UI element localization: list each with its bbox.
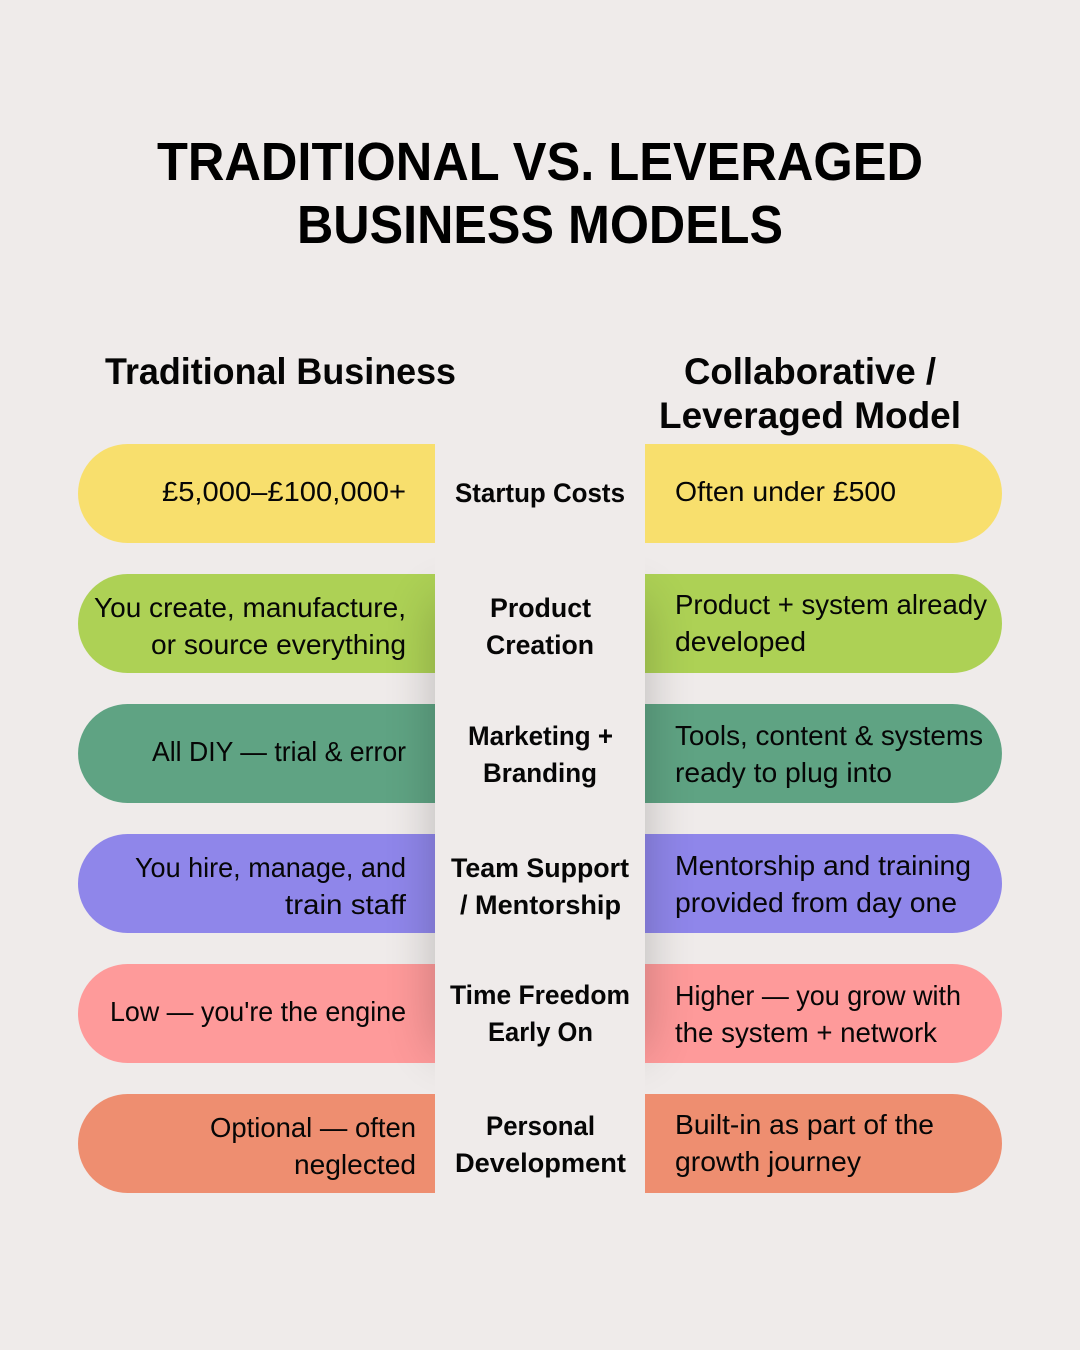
text: traditional column values: £5,000–£100,000+ — [162, 476, 406, 507]
text: category labels: Startup Costs — [455, 478, 625, 508]
title: TRADITIONAL VS. LEVERAGED — [157, 132, 923, 192]
text: leveraged column values: Built-in as part of the — [675, 1109, 934, 1140]
text: leveraged column values: Tools, content & systems — [675, 720, 983, 751]
pill: time freedom leveraged — [645, 964, 1002, 1063]
pill: startup costs traditional — [78, 444, 435, 543]
panel: right column pills — [645, 444, 1002, 1193]
text: category labels: Early On — [488, 1017, 593, 1047]
text: category labels: Product — [490, 593, 591, 623]
pill: product creation leveraged — [645, 574, 1002, 673]
text: traditional column values — [94, 476, 416, 1180]
title — [157, 132, 923, 255]
pill: product creation traditional — [78, 574, 435, 673]
text: category labels: Branding — [483, 758, 597, 788]
pill: personal development leveraged — [645, 1094, 1002, 1193]
text: leveraged column values: provided from day one — [675, 887, 957, 918]
panel: centre category column — [435, 444, 645, 1193]
text: leveraged column values: Often under £500 — [675, 476, 896, 507]
text: leveraged column values: Product + system already — [675, 589, 987, 620]
text: category labels — [450, 478, 630, 1178]
text: leveraged column values: Mentorship and training — [675, 850, 971, 881]
text: traditional column values: train staff — [285, 889, 406, 920]
heading: collaborative leveraged model: Collaborative / — [684, 351, 936, 392]
text: leveraged column values: growth journey — [675, 1146, 861, 1177]
pill: marketing leveraged — [645, 704, 1002, 803]
text: category labels: Development — [455, 1148, 626, 1178]
text: category labels: Team Support — [451, 853, 629, 883]
text: leveraged column values: ready to plug into — [675, 757, 892, 788]
text: leveraged column values: developed — [675, 626, 806, 657]
panel: left column pills — [78, 444, 435, 1193]
text: category labels: Creation — [486, 630, 594, 660]
text: category labels: Time Freedom — [450, 980, 630, 1010]
pill: team support traditional — [78, 834, 435, 933]
text: category labels: Marketing + — [468, 721, 613, 751]
text: leveraged column values — [675, 476, 987, 1177]
text: category labels: Personal — [486, 1111, 595, 1141]
pill: time freedom traditional — [78, 964, 435, 1063]
text: traditional column values: All DIY — trial & error — [152, 736, 406, 767]
text: traditional column values: Low — you're the engine — [110, 996, 406, 1027]
pill: personal development traditional — [78, 1094, 435, 1193]
text: traditional column values: neglected — [294, 1149, 416, 1180]
heading: traditional business: Traditional Business — [105, 351, 456, 392]
pill: startup costs leveraged — [645, 444, 1002, 543]
text: leveraged column values: Higher — you grow with — [675, 980, 961, 1011]
text: traditional column values: You create, manufacture, — [94, 592, 406, 623]
pill: team support leveraged — [645, 834, 1002, 933]
text: traditional column values: You hire, manage, and — [135, 852, 406, 883]
text: traditional column values: Optional — often — [210, 1112, 416, 1143]
text: leveraged column values: the system + network — [675, 1017, 938, 1048]
heading: collaborative leveraged model: Leveraged Model — [659, 395, 961, 436]
pill: marketing traditional — [78, 704, 435, 803]
heading: collaborative leveraged model — [659, 351, 961, 436]
text: category labels: / Mentorship — [460, 890, 621, 920]
text: traditional column values: or source everything — [151, 629, 406, 660]
title: BUSINESS MODELS — [297, 195, 783, 255]
